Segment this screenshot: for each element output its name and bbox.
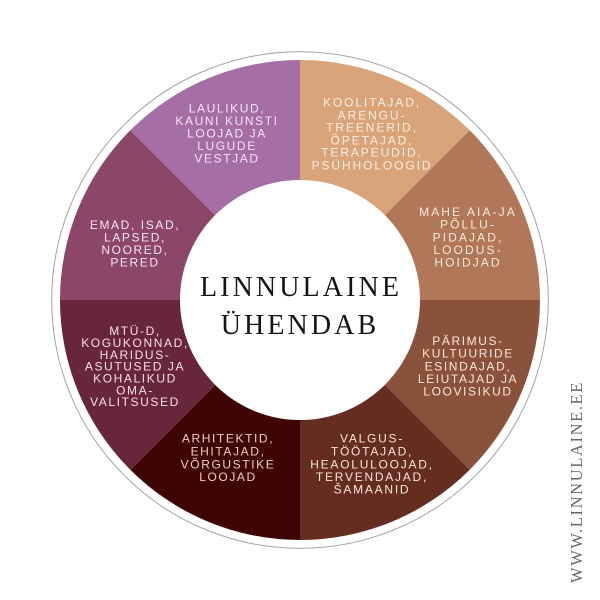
segment: Pärimuskultuuride esindajad: KULTUURIDE [422,347,514,361]
segment: Mahe aia-ja põllupidajad: HOIDJAD [434,256,502,270]
segment: Pärimuskultuuride esindajad: LEIUTAJAD JA [418,372,518,386]
segment: Arhitektid: EHITAJAD, [191,445,265,459]
segment: MTÜ-d: MTÜ-D, [109,324,161,338]
segment: Koolitajad: TERAPEUDID, [321,146,423,160]
segment: Pärimuskultuuride esindajad: ESINDAJAD, [425,359,511,373]
segment: Valgustöötajad: ŠAMAANID [334,482,410,497]
segment: Koolitajad: PSÜHHOLOOGID [312,158,432,172]
outer ring [52,52,548,548]
segment: Emad, isad: PERED [110,255,160,269]
segment: MTÜ-d: ASUTUSED JA [85,360,185,374]
segment: Valgustöötajad [300,300,470,540]
center circle [180,180,420,420]
segment: Arhitektid: ARHITEKTID, [182,432,274,446]
segment: MTÜ-d [60,300,300,470]
segment: Laulikud [130,60,300,300]
segment: Emad, isad [60,130,300,300]
segment: Mahe aia-ja põllupidajad: LOODUS- [433,243,503,257]
segment: Koolitajad: ÕPETAJAD, [331,132,413,147]
segment: Arhitektid [130,300,300,540]
title: LINNULAINE [200,272,402,303]
segment: MTÜ-d: KOGUKONNAD, [81,336,189,350]
segment: Pärimuskultuuride esindajad: LOOVISIKUD [423,385,513,399]
segment: Valgustöötajad: TÖÖTAJAD, [331,445,413,459]
segment: Koolitajad: TREENERID, [326,121,418,135]
segment: Pärimuskultuuride esindajad: PÄRIMUS- [432,334,504,348]
segment: MTÜ-d: HARIDUS- [100,348,170,362]
segment: Koolitajad: KOOLITAJAD, [323,96,421,110]
segment: MTÜ-d: VALITSUSED [90,395,180,409]
segment: Valgustöötajad: VALGUS- [340,432,404,446]
segment: Arhitektid: VÕRGUSTIKE [181,456,275,471]
segment: Emad, isad: LAPSED, [104,230,166,244]
segment: Koolitajad: ARENGU- [338,108,406,122]
segment: Emad, isad: NOORED, [101,243,169,257]
segment: Emad, isad: EMAD, ISAD, [90,218,180,232]
segment: MTÜ-d: OMA- [116,383,154,397]
segment: Valgustöötajad: TERVENDAJAD, [316,470,428,484]
segment: Mahe aia-ja põllupidajad: MAHE AIA-JA [419,205,517,219]
title: ÜHENDAB [221,310,379,341]
segment: Laulikud: VESTJAD [194,152,260,166]
segment: MTÜ-d: KOHALIKUD [93,371,177,385]
segment: Koolitajad [300,60,470,300]
segment: Arhitektid: LOOJAD [199,470,257,484]
segment: Valgustöötajad: HEAOLULOOJAD, [310,457,434,471]
segment: Mahe aia-ja põllupidajad: PÕLLU- [440,217,496,232]
segment: Laulikud: LUGUDE [197,139,257,153]
segment: Laulikud: LOOJAD JA [187,127,267,141]
segment: Mahe aia-ja põllupidajad: PIDAJAD, [433,230,503,244]
website label: WWW.LINNULAINE.EE [567,381,586,583]
segment: Mahe aia-ja põllupidajad [300,130,540,300]
segment: Laulikud: LAULIKUD, [189,101,265,115]
segment: Laulikud: KAUNI KUNSTI [175,114,279,128]
segment: Pärimuskultuuride esindajad [300,300,540,470]
